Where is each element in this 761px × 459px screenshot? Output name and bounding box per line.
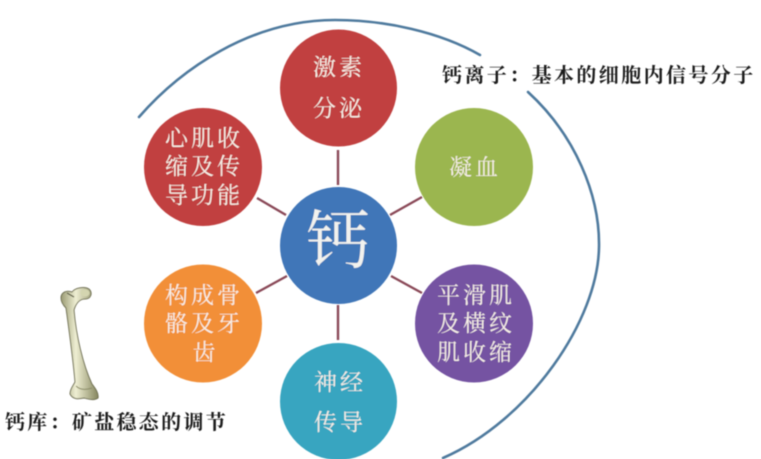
node: cardiac contraction and conduction (144, 108, 262, 226)
label: calcium ion: 钙离子：基本的细胞内信号分子 (442, 63, 756, 87)
node: calcium centre (280, 187, 397, 304)
node: hormone secretion: 激素 (313, 55, 365, 80)
node: bone and teeth: 齿 (192, 340, 216, 365)
connector lines (256, 150, 422, 340)
label: calcium store: 钙库：矿盐稳态的调节 (5, 410, 228, 434)
node: cardiac contraction and conduction: 心肌收 (165, 126, 243, 151)
node: nerve conduction: 传导 (314, 410, 366, 435)
node: coagulation: 凝血 (449, 155, 501, 180)
node: bone and teeth (144, 264, 262, 382)
node: cardiac contraction and conduction: 导功能 (165, 183, 243, 208)
icon: femur bone (61, 288, 98, 400)
node: nerve conduction: 神经 (314, 370, 366, 395)
node: cardiac contraction and conduction: 缩及传 (165, 154, 243, 179)
node: smooth and striated muscle contraction: 平滑肌 (437, 283, 515, 308)
node: smooth and striated muscle contraction: 及横纹 (437, 311, 515, 336)
node: nerve conduction (280, 343, 397, 459)
node: bone and teeth: 骼及牙 (165, 311, 243, 336)
node: hormone secretion: 分泌 (313, 96, 365, 121)
node: calcium centre: 钙 (306, 206, 370, 277)
node: coagulation (415, 108, 533, 226)
node: bone and teeth: 构成骨 (165, 283, 243, 308)
node: smooth and striated muscle contraction: 肌收缩 (437, 340, 515, 365)
node: smooth and striated muscle contraction (415, 264, 533, 382)
node: hormone secretion (280, 30, 397, 146)
enclosing arc (139, 20, 599, 458)
